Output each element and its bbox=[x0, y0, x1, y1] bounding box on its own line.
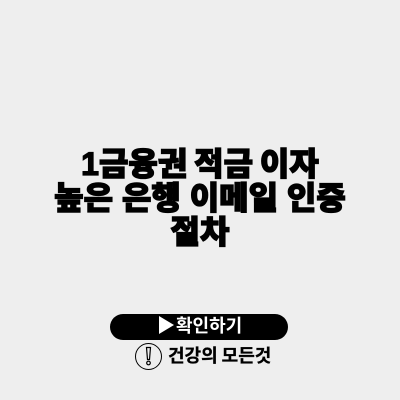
brand text: 건강의 모든것 bbox=[168, 346, 271, 366]
title: 높은 은행 이메일 인증 bbox=[54, 180, 346, 216]
title bbox=[54, 146, 346, 250]
title: 절차 bbox=[171, 214, 229, 250]
confirm button bbox=[110, 314, 288, 340]
button label: 확인하기 bbox=[176, 316, 242, 336]
title: 1금융권 적금 이자 bbox=[81, 146, 319, 182]
icon: play triangle bbox=[159, 316, 174, 334]
icon: exclamation circle bbox=[135, 343, 162, 370]
